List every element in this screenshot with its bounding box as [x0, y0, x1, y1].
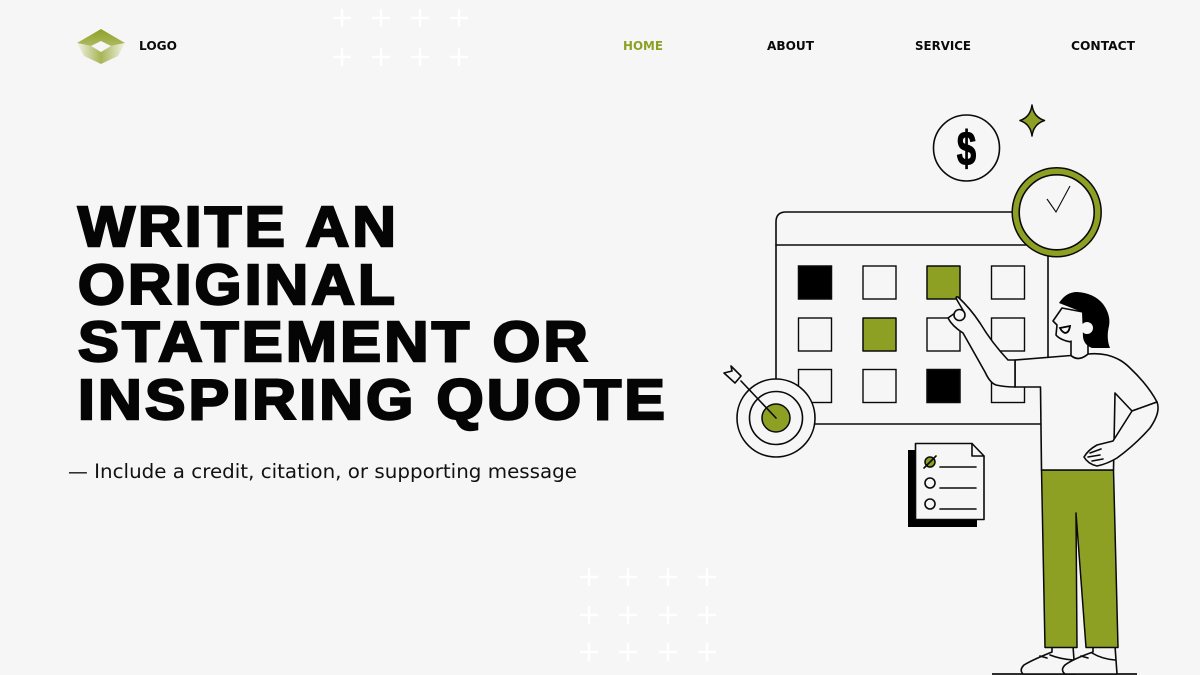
- icon: sparkle star: [1020, 105, 1044, 136]
- logo icon: [77, 29, 125, 64]
- title: [78, 195, 668, 432]
- icon: dollar coin: $: [957, 121, 976, 175]
- nav: service: SERVICE: [915, 38, 971, 53]
- hair: [1059, 292, 1110, 348]
- ground line: [992, 673, 1137, 675]
- calendar row 3: [798, 370, 1024, 402]
- trousers: [1042, 470, 1118, 648]
- title: ORIGINAL: [78, 253, 398, 317]
- shirt: [1015, 354, 1157, 470]
- pointing arm: [948, 297, 1015, 387]
- decorative plus pattern: bottom: [580, 568, 716, 661]
- shoes: [1021, 646, 1117, 674]
- icon: dollar coin: [934, 115, 1000, 181]
- decorative plus pattern: top: [333, 9, 468, 66]
- nav: about: ABOUT: [767, 38, 814, 53]
- arm on hip: [1084, 402, 1158, 466]
- supporting message: — Include a credit, citation, or supporting message: [68, 460, 577, 483]
- neck and face: [1053, 308, 1088, 358]
- title: STATEMENT OR: [78, 310, 591, 374]
- nav: home: HOME: [623, 38, 663, 53]
- logo text: LOGO: [139, 38, 177, 53]
- icon: clock: [1012, 168, 1101, 257]
- title: WRITE AN: [78, 195, 399, 259]
- icon: target with arrow: [724, 366, 815, 457]
- title: INSPIRING QUOTE: [78, 368, 668, 432]
- icon: checklist document: [908, 444, 984, 527]
- mouth: [1060, 326, 1070, 333]
- calendar row 2: [798, 318, 1024, 351]
- navigation: [623, 38, 1135, 53]
- nav: contact: CONTACT: [1071, 38, 1135, 53]
- illustration: person: [948, 292, 1158, 674]
- illustration: calendar: [776, 212, 1048, 424]
- calendar row 1: [798, 266, 1024, 299]
- ear: [1081, 322, 1093, 334]
